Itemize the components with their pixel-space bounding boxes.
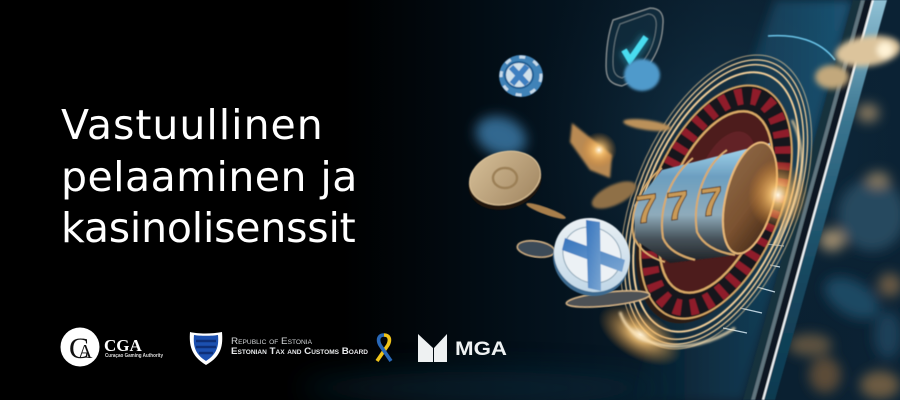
Estonian Tax and Customs Board text: Republic of Estonia	[231, 336, 312, 346]
blurred gold coins in foreground top right	[815, 32, 900, 89]
slot machine reels 777: 7	[700, 178, 722, 226]
circular CGA emblem	[60, 328, 100, 366]
MGA logo mark	[418, 334, 447, 362]
circular CGA emblem: A	[78, 341, 93, 363]
blurred gold coins	[516, 117, 671, 310]
gold coin	[462, 144, 548, 218]
phone frame edge	[743, 0, 887, 400]
title	[61, 101, 358, 252]
Estonian Tax and Customs Board text: Estonian Tax and Customs Board	[231, 346, 369, 356]
blue light arc on glass	[768, 36, 835, 60]
slot machine reels 777	[632, 137, 787, 263]
small blue Finnish chip	[499, 55, 543, 97]
CGA name: Curaçao Gaming Authority	[105, 353, 163, 359]
slot machine reels 777: 7	[635, 185, 657, 233]
circular CGA emblem: C	[69, 332, 89, 365]
Ukraine ribbon	[377, 335, 391, 361]
blurred blue chip	[470, 109, 532, 163]
golden glow rings	[582, 28, 850, 376]
glass reflections lines	[723, 243, 784, 333]
large Finnish flag chip	[538, 203, 645, 311]
Estonian coat of arms	[190, 332, 222, 365]
shield with check mark	[606, 8, 663, 91]
blurred background chips and coins right of phone	[788, 104, 900, 399]
phone glass	[630, 0, 853, 400]
CGA name	[104, 336, 163, 359]
slot machine reels 777: 7	[666, 182, 688, 230]
roulette wheel	[585, 30, 847, 374]
light flares on wheel	[588, 120, 808, 379]
title: pelaaminen ja	[61, 152, 358, 200]
Estonian Tax and Customs Board text	[231, 336, 369, 356]
MGA name: MGA	[455, 338, 507, 360]
title: Vastuullinen	[61, 101, 324, 149]
title: kasinolisenssit	[61, 204, 356, 252]
CGA name: CGA	[104, 336, 142, 355]
